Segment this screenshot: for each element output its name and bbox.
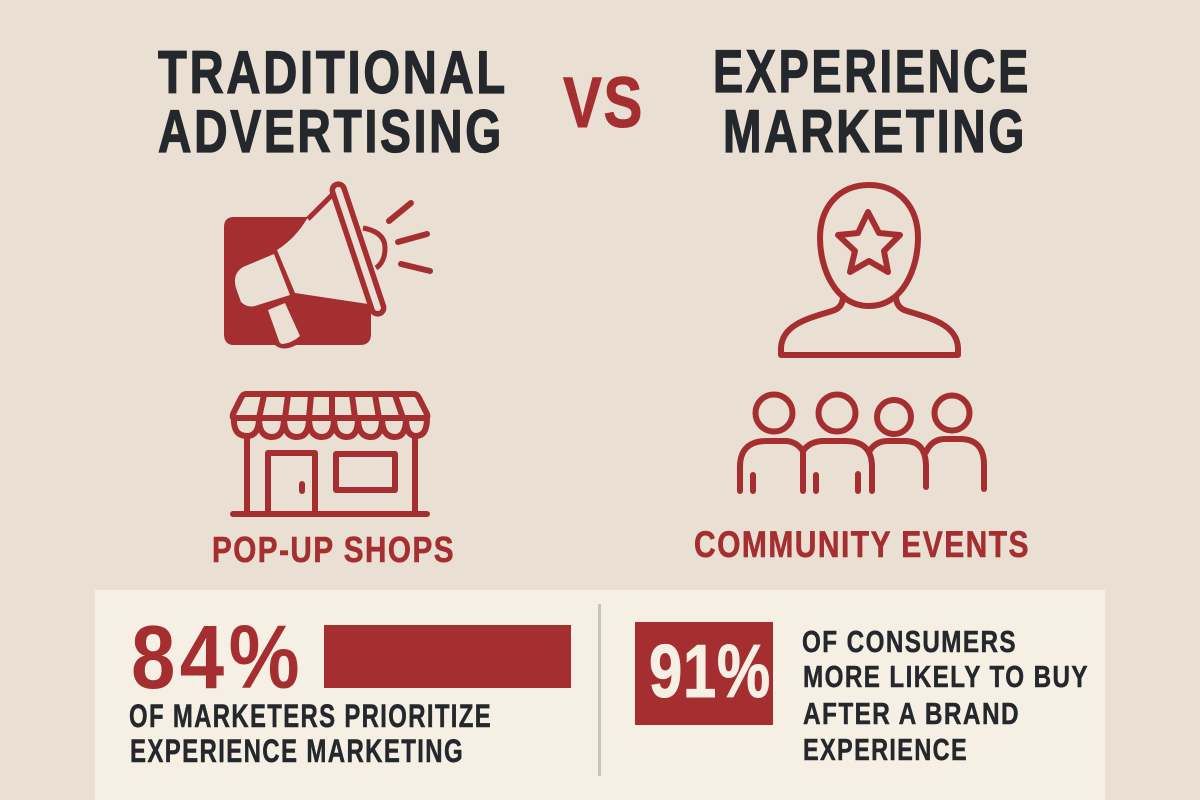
- title: experience marketing: MARKETING: [723, 98, 1027, 165]
- stat: 91 percent: EXPERIENCE: [803, 732, 968, 767]
- stat: 91 percent: OF CONSUMERS: [802, 624, 1017, 659]
- icon: megaphone: [224, 183, 430, 349]
- title: traditional advertising: TRADITIONAL: [158, 39, 508, 106]
- title: traditional advertising: ADVERTISING: [158, 98, 504, 165]
- title: traditional advertising: [158, 39, 508, 165]
- label: community events: COMMUNITY EVENTS: [694, 524, 1030, 565]
- title: experience marketing: [713, 38, 1031, 165]
- stat: 84 percent: [129, 608, 571, 769]
- stat: 91 percent: AFTER A BRAND: [803, 696, 1020, 731]
- stat: 91 percent: MORE LIKELY TO BUY: [803, 659, 1089, 694]
- stat: 84 percent: EXPERIENCE MARKETING: [130, 733, 464, 769]
- title: experience marketing: EXPERIENCE: [713, 38, 1031, 105]
- icon: community group: [740, 394, 984, 491]
- label: pop-up shops: POP-UP SHOPS: [212, 529, 455, 570]
- stat: 91 percent: [635, 622, 1089, 767]
- icon: person with star: [781, 185, 958, 355]
- icon: storefront: [233, 394, 427, 514]
- stat: 91 percent: 91%: [649, 629, 771, 713]
- stat: 84 percent: OF MARKETERS PRIORITIZE: [129, 698, 492, 734]
- stat: 84 percent: 84%: [131, 608, 304, 708]
- vs label: VS: [563, 64, 644, 143]
- panel: statistics: [95, 590, 1105, 800]
